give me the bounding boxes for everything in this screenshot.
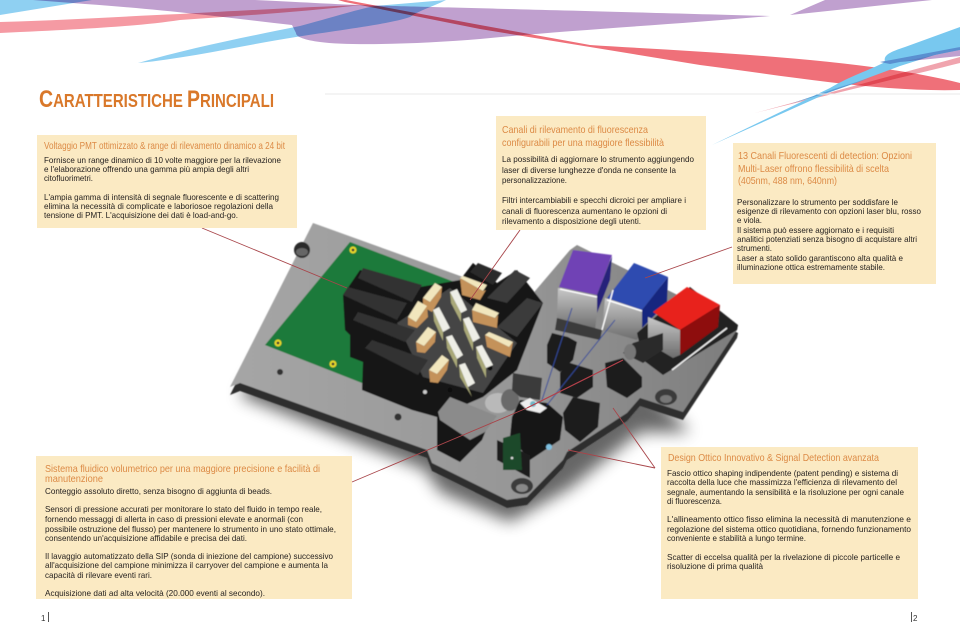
body text: fluidics	[45, 487, 336, 598]
leader lines	[202, 228, 732, 482]
body text: fluidics: Acquisizione dati ad alta velocità (20.000 eventi al secondo).	[45, 589, 265, 598]
body text: PMT	[44, 156, 281, 220]
green circuit board	[265, 242, 457, 383]
body text: optical design: conveniente e stabilità a lungo termine.	[667, 534, 806, 543]
base plate	[230, 223, 738, 508]
body text: channels: rilevamento a disposizione degli utenti.	[502, 217, 641, 226]
panel: 13 fluorescence channels	[733, 143, 936, 284]
central optics and green board	[497, 398, 563, 478]
body text: channels: La possibilità di aggiornare lo strumento aggiungendo	[502, 155, 694, 164]
laser: blue	[602, 263, 668, 340]
panel: PMT and dynamic range	[37, 135, 297, 228]
title: CARATTERISTICHE PRINCIPALI	[39, 86, 274, 113]
body text: 13 channels: illuminazione ottica estremamente stabile.	[737, 263, 885, 272]
body text: optical design	[667, 469, 912, 571]
lower housing and cylinder	[412, 389, 519, 462]
heading: channels: configurabili per una maggiore flessibilità	[502, 138, 664, 149]
panel: optical design	[661, 447, 918, 599]
body text: fluidics: Conteggio assoluto diretto, senza bisogno di aggiunta di beads.	[45, 487, 272, 496]
body text: fluidics: possibile ostruzione del flusso) per mantenere lo strumento in uno stato ottimale,	[45, 525, 336, 534]
background: coloured ribbons	[0, 0, 960, 145]
body text: 13 channels	[737, 198, 921, 272]
body text: fluidics: consentendo un'acquisizione affidabile e precisa dei dati.	[45, 534, 247, 543]
laser: red with plinth	[637, 287, 738, 375]
body text: PMT: e l'elaborazione offrendo una gamma più ampia degli altri	[44, 165, 249, 174]
laser: violet	[557, 250, 612, 330]
heading: fluidics: manutenzione	[45, 474, 103, 485]
body text: fluidics: fornendo messaggi di allerta in caso di pressioni elevate e anormali (con	[45, 515, 303, 524]
body text: optical design: Fascio ottico shaping indipendente (patent pending) e sistema di	[667, 469, 898, 478]
body text: optical design: regolazione del sistema ottico quotidiana, fornendo funzionamento	[667, 525, 912, 534]
body text: PMT: L'ampia gamma di intensità di segnale fluorescente e di scattering	[44, 193, 279, 202]
body text: optical design: raccolta della luce che massimizza l'efficienza di rilevamento del	[667, 478, 897, 487]
tan filters	[408, 276, 513, 383]
body text: channels: personalizzazione.	[502, 176, 567, 185]
panel: fluidics system	[36, 456, 352, 599]
body text: 13 channels: analitici potenziati senza bisogno di acquistare altri	[737, 235, 917, 244]
body text: PMT: Fornisce un range dinamico di 10 volte maggiore per la rilevazione	[44, 156, 281, 165]
body text: 13 channels: Personalizzare lo strumento per soddisfare le	[737, 198, 898, 207]
page number 2	[912, 612, 918, 622]
heading: PMT: Voltaggio PMT ottimizzato & range di rilevamento dinamico a 24 bit	[44, 141, 285, 152]
laser beams	[542, 308, 615, 405]
body text: 13 channels: e viola.	[737, 216, 762, 225]
body text: PMT: elimina la necessità di complicate e laboriosoe regolazioni della	[44, 202, 274, 211]
page number 1	[41, 612, 48, 622]
body text: PMT: citofluorimetri.	[44, 174, 93, 183]
body text: channels: Filtri intercambiabili e specchi dicroici per ampliare i	[502, 196, 686, 205]
body text: channels: canali di fluorescenza aumentano le opzioni di	[502, 207, 667, 216]
heading: 13 channels: Multi-Laser offrono flessibilità di scelta	[738, 164, 889, 175]
body text: optical design: di fluorescenza.	[667, 497, 722, 506]
body text: 13 channels: Laser a stato solido garantiscono alta qualità e	[737, 254, 903, 263]
optical mounts	[512, 318, 663, 442]
device illustration	[230, 223, 738, 522]
heading: fluidics	[45, 464, 320, 485]
white filter strips	[433, 289, 493, 397]
heading: channels	[502, 125, 664, 149]
body text: fluidics: Il lavaggio automatizzato della SIP (sonda di iniezione del campione) successivo	[45, 552, 333, 561]
body text: 13 channels: Il sistema può essere aggiornato e i requisiti	[737, 226, 894, 235]
body text: optical design: L'allineamento ottico fisso elimina la necessità di manutenzione e	[667, 515, 912, 524]
body text: fluidics: all'acquisizione del campione minimizza il carryover del campione e aumenta la	[45, 561, 328, 570]
panel: configurable channels	[496, 116, 706, 230]
body text: fluidics: capacità di rilevare eventi rari.	[45, 571, 152, 580]
body text: channels: laser di diverse lunghezze d'onda ne consente la	[502, 166, 676, 175]
heading: 13 channels	[738, 151, 912, 187]
body text: PMT: tensione di PMT. L'acquisizione dei dati è load-and-go.	[44, 211, 238, 220]
body text: optical design: risoluzione di prima qualità	[667, 562, 763, 571]
body text: fluidics: Sensori di pressione accurati per monitorare lo stato del fluido in tempo reale,	[45, 505, 322, 514]
body text: 13 channels: esigenze di rilevamento con opzioni laser blu, rosso	[737, 207, 921, 216]
detector block	[343, 263, 543, 417]
heading: 13 channels: (405nm, 488 nm, 640nm)	[738, 176, 837, 187]
heading: optical design: Design Ottico Innovativo & Signal Detection avanzata	[668, 453, 879, 464]
heading: 13 channels: 13 Canali Fluorescenti di detection: Opzioni	[738, 151, 912, 162]
heading: fluidics: Sistema fluidico volumetrico per una maggiore precisione e facilità di	[45, 464, 320, 475]
body text: 13 channels: strumenti.	[737, 244, 772, 253]
title rule	[325, 93, 960, 95]
body text: optical design: Scatter di eccelsa qualità per la rivelazione di piccole particelle e	[667, 553, 901, 562]
body text: optical design: segnale, aumentando la sensibilità e la risoluzione per ogni canale	[667, 488, 904, 497]
body text: channels	[502, 155, 694, 226]
heading: channels: Canali di rilevamento di fluorescenza	[502, 125, 648, 136]
